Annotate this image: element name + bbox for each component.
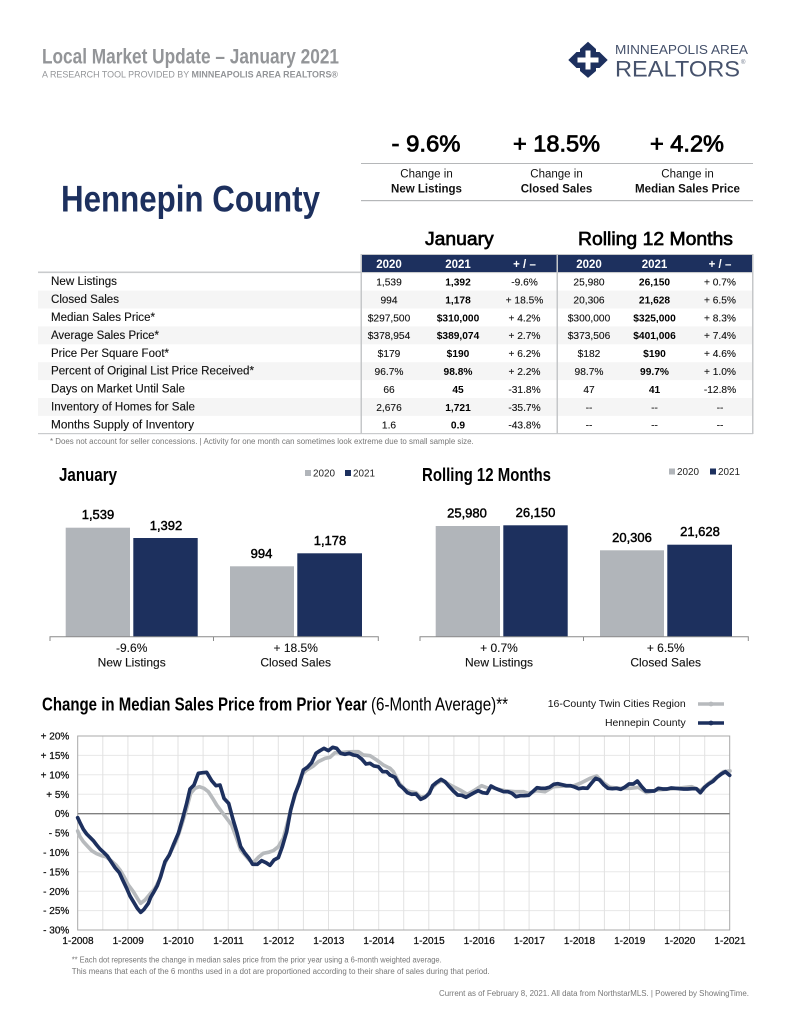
row: new listings: 26,150 bbox=[639, 278, 670, 288]
table header band: 2020 bbox=[576, 259, 602, 271]
row: closed sales: 994 bbox=[380, 295, 398, 306]
series: 16-County Twin Cities Region bbox=[78, 752, 730, 903]
row: inventory bbox=[51, 402, 723, 414]
x axis labels: 1-2020 bbox=[664, 936, 696, 947]
logo wordmark bbox=[615, 43, 749, 82]
table header band: 2021 bbox=[642, 259, 668, 271]
row: closed sales: 1,178 bbox=[445, 295, 471, 306]
legend bbox=[305, 468, 375, 480]
row: average sales price: Average Sales Price* bbox=[51, 330, 160, 342]
legend: 2021 bbox=[353, 468, 375, 480]
x axis labels: 1-2017 bbox=[514, 936, 545, 947]
row: new listings: -9.6% bbox=[511, 278, 538, 288]
row: percent of original list price: 98.7% bbox=[575, 367, 603, 378]
bars: closed sales: 1,178 bbox=[314, 533, 346, 548]
bar chart: Rolling 12 Months bbox=[420, 464, 748, 670]
bars: closed sales bbox=[600, 524, 732, 637]
y axis labels: + 20% bbox=[41, 732, 69, 742]
y axis labels: - 25% bbox=[43, 906, 69, 917]
y axis labels: + 10% bbox=[41, 770, 69, 781]
bars: closed sales: 20,306 bbox=[612, 530, 652, 545]
bars: new listings bbox=[436, 505, 568, 637]
chart heading: January bbox=[59, 464, 118, 485]
row: inventory: -- bbox=[586, 403, 592, 414]
metric: new listings: Change in bbox=[400, 169, 453, 181]
table section headings bbox=[425, 228, 733, 249]
y axis labels bbox=[41, 732, 69, 937]
row: median sales price: $300,000 bbox=[568, 313, 611, 324]
table header band: + / – bbox=[709, 259, 732, 271]
table header band: 2021 bbox=[445, 259, 471, 271]
y axis labels: - 30% bbox=[43, 926, 69, 937]
row: price per square foot: $190 bbox=[447, 349, 470, 360]
row: inventory: -- bbox=[717, 403, 723, 414]
table section headings: January bbox=[425, 228, 494, 249]
row: days on market bbox=[51, 384, 736, 396]
row: inventory: -- bbox=[651, 403, 658, 414]
row: median sales price: + 4.2% bbox=[508, 313, 541, 324]
x axis labels: 1-2015 bbox=[414, 936, 445, 947]
row: median sales price: $325,000 bbox=[633, 313, 676, 324]
row: days on market: 41 bbox=[649, 385, 660, 396]
row: average sales price: + 7.4% bbox=[704, 331, 736, 342]
axis labels: New Listings bbox=[465, 656, 533, 670]
row: price per square foot: Price Per Square Foot* bbox=[51, 348, 170, 360]
legend: 2020 bbox=[313, 468, 335, 480]
metric: closed sales: + 18.5% bbox=[513, 131, 600, 157]
row: median sales price: $297,500 bbox=[368, 313, 411, 324]
row: median sales price: Median Sales Price* bbox=[51, 312, 156, 324]
table header band bbox=[362, 255, 752, 272]
x axis labels bbox=[62, 936, 746, 947]
axis labels: Closed Sales bbox=[260, 656, 331, 670]
y axis labels: - 5% bbox=[49, 829, 69, 840]
row: closed sales: + 6.5% bbox=[704, 295, 736, 306]
chart footnote: ** Each dot represents the change in median sales price from the prior year using a 6-month weighted average. bbox=[72, 956, 442, 965]
metric: closed sales: Closed Sales bbox=[521, 184, 592, 196]
chart footnote: This means that each of the 6 months used in a dot are proportioned according to their share of sales during that period. bbox=[72, 967, 490, 976]
row: price per square foot: $190 bbox=[643, 349, 666, 360]
row: new listings: + 0.7% bbox=[704, 278, 736, 288]
chart heading: Rolling 12 Months bbox=[422, 464, 551, 485]
row: new listings: 25,980 bbox=[573, 278, 605, 288]
metric: median sales price: Change in bbox=[661, 169, 714, 181]
bars: new listings: 26,150 bbox=[516, 505, 555, 520]
metric: new listings bbox=[391, 131, 462, 196]
row: median sales price: $310,000 bbox=[437, 313, 480, 324]
table footnote: * Does not account for seller concessions. | Activity for one month can sometimes look extreme due to small sample size. bbox=[50, 437, 474, 446]
table header band: + / – bbox=[513, 259, 536, 271]
row: inventory: Inventory of Homes for Sale bbox=[51, 402, 195, 414]
row: average sales price: $401,006 bbox=[633, 331, 676, 342]
heading: line chart title: (6-Month Average)** bbox=[371, 695, 508, 715]
logo: Minneapolis Area Realtors bbox=[568, 42, 749, 82]
metric: closed sales: Change in bbox=[530, 169, 583, 181]
row: days on market: 47 bbox=[583, 385, 595, 396]
row: price per square foot bbox=[51, 348, 736, 360]
row: days on market: Days on Market Until Sale bbox=[51, 384, 185, 396]
row: closed sales: + 18.5% bbox=[506, 295, 543, 306]
line chart legend: Hennepin County bbox=[605, 717, 686, 729]
metric: closed sales bbox=[513, 131, 600, 196]
row: closed sales bbox=[51, 294, 736, 306]
row: average sales price: $389,074 bbox=[437, 331, 480, 342]
x axis labels: 1-2014 bbox=[363, 936, 395, 947]
row: days on market: -31.8% bbox=[508, 385, 541, 396]
row: months supply: -- bbox=[586, 421, 592, 432]
table section headings: Rolling 12 Months bbox=[578, 228, 733, 249]
row: percent of original list price: 98.8% bbox=[444, 367, 472, 378]
line chart: change in median sales price bbox=[41, 732, 746, 947]
row: percent of original list price bbox=[51, 366, 736, 378]
row: months supply: -43.8% bbox=[508, 421, 541, 432]
row: percent of original list price: 99.7% bbox=[640, 367, 669, 378]
x axis labels: 1-2013 bbox=[313, 936, 345, 947]
axis labels bbox=[98, 641, 331, 670]
row: months supply: -- bbox=[717, 421, 723, 432]
row: average sales price bbox=[51, 330, 736, 342]
axis labels: + 6.5% bbox=[647, 641, 685, 655]
axis labels: Closed Sales bbox=[630, 656, 701, 670]
row: days on market: -12.8% bbox=[704, 385, 736, 396]
x axis labels: 1-2021 bbox=[714, 936, 746, 947]
y axis labels: 0% bbox=[55, 809, 69, 820]
row: new listings: 1,539 bbox=[376, 278, 402, 288]
row: new listings: New Listings bbox=[51, 276, 117, 288]
row: days on market: 66 bbox=[383, 385, 395, 396]
axis labels: -9.6% bbox=[116, 641, 148, 655]
x axis labels: 1-2016 bbox=[464, 936, 495, 947]
heading: line chart title: Change in Median Sales Price from Prior Year bbox=[42, 695, 367, 715]
metric: median sales price: Median Sales Price bbox=[635, 184, 740, 196]
x axis labels: 1-2010 bbox=[163, 936, 194, 947]
logo wordmark: MINNEAPOLIS AREA bbox=[615, 43, 749, 57]
row: new listings: 1,392 bbox=[445, 278, 471, 288]
line chart legend: 16-County Twin Cities Region bbox=[548, 698, 686, 710]
row: closed sales: 20,306 bbox=[573, 295, 605, 306]
metric: new listings: New Listings bbox=[391, 184, 462, 196]
bars: new listings: 1,392 bbox=[150, 518, 182, 533]
metric: median sales price: + 4.2% bbox=[650, 131, 724, 157]
heading: county name: Hennepin County bbox=[61, 178, 320, 220]
row: price per square foot: $182 bbox=[578, 349, 601, 360]
x axis labels: 1-2011 bbox=[213, 936, 244, 947]
row: average sales price: $373,506 bbox=[568, 331, 611, 342]
metric: new listings: - 9.6% bbox=[392, 131, 460, 157]
row: closed sales: 21,628 bbox=[639, 295, 670, 306]
bars: closed sales bbox=[230, 533, 362, 637]
x axis labels: 1-2019 bbox=[614, 936, 646, 947]
row: months supply: -- bbox=[651, 421, 658, 432]
header title block bbox=[42, 45, 339, 80]
row: percent of original list price: 96.7% bbox=[375, 367, 403, 378]
row: days on market: 45 bbox=[452, 385, 464, 396]
row: median sales price bbox=[51, 312, 736, 324]
bars: new listings: 25,980 bbox=[447, 506, 487, 521]
subtitle: A RESEARCH TOOL PROVIDED BY MINNEAPOLIS AREA REALTORS® bbox=[42, 69, 338, 80]
line chart legend bbox=[548, 698, 724, 729]
row: months supply bbox=[51, 419, 723, 432]
axis labels: New Listings bbox=[98, 656, 166, 670]
bars: new listings: 1,539 bbox=[82, 507, 114, 522]
row: months supply: 0.9 bbox=[451, 421, 465, 432]
row: median sales price: + 8.3% bbox=[704, 313, 736, 324]
bar chart: January bbox=[50, 464, 378, 670]
row: inventory: 1,721 bbox=[445, 403, 471, 414]
series: Hennepin County bbox=[78, 747, 730, 912]
metric: median sales price bbox=[635, 131, 740, 196]
legend bbox=[669, 466, 740, 478]
row: percent of original list price: Percent of Original List Price Received* bbox=[51, 366, 255, 378]
row: average sales price: + 2.7% bbox=[508, 331, 541, 342]
row: percent of original list price: + 2.2% bbox=[508, 367, 541, 378]
x axis labels: 1-2018 bbox=[564, 936, 596, 947]
x axis labels: 1-2008 bbox=[62, 936, 94, 947]
y axis labels: - 10% bbox=[43, 848, 69, 859]
logo wordmark: ® bbox=[741, 59, 746, 66]
row: price per square foot: + 4.6% bbox=[704, 349, 736, 360]
icon: logo mark bbox=[568, 42, 608, 78]
axis labels: + 18.5% bbox=[274, 641, 318, 655]
panel: data table bbox=[38, 228, 754, 434]
panel: key change metrics bbox=[361, 131, 753, 201]
row: price per square foot: $179 bbox=[378, 349, 401, 360]
row: months supply: 1.6 bbox=[382, 421, 396, 432]
bars: new listings bbox=[66, 507, 198, 637]
legend: 2021 bbox=[718, 466, 740, 478]
x axis labels: 1-2012 bbox=[263, 936, 295, 947]
title: Local Market Update – January 2021 bbox=[42, 45, 339, 68]
legend: 2020 bbox=[677, 466, 699, 478]
row: inventory: -35.7% bbox=[508, 403, 541, 414]
x axis labels: 1-2009 bbox=[113, 936, 144, 947]
axis labels bbox=[465, 641, 701, 670]
footer source line: Current as of February 8, 2021. All data from NorthstarMLS. | Powered by ShowingTime. bbox=[439, 989, 749, 998]
y axis labels: + 5% bbox=[46, 790, 69, 801]
y axis labels: - 15% bbox=[43, 867, 69, 878]
row: price per square foot: + 6.2% bbox=[508, 349, 541, 360]
chart footnote bbox=[72, 956, 490, 976]
y axis labels: + 15% bbox=[41, 751, 69, 762]
axis labels: + 0.7% bbox=[480, 641, 518, 655]
bars: closed sales: 21,628 bbox=[680, 524, 720, 539]
table header band: 2020 bbox=[376, 259, 402, 271]
row: percent of original list price: + 1.0% bbox=[704, 367, 736, 378]
row: inventory: 2,676 bbox=[376, 403, 402, 414]
row: closed sales: Closed Sales bbox=[51, 294, 119, 306]
row: months supply: Months Supply of Inventory bbox=[51, 419, 194, 431]
y axis labels: - 20% bbox=[43, 887, 69, 898]
row: average sales price: $378,954 bbox=[368, 331, 411, 342]
row: new listings bbox=[51, 276, 736, 288]
logo wordmark: REALTORS bbox=[615, 57, 740, 82]
bars: closed sales: 994 bbox=[251, 546, 272, 561]
